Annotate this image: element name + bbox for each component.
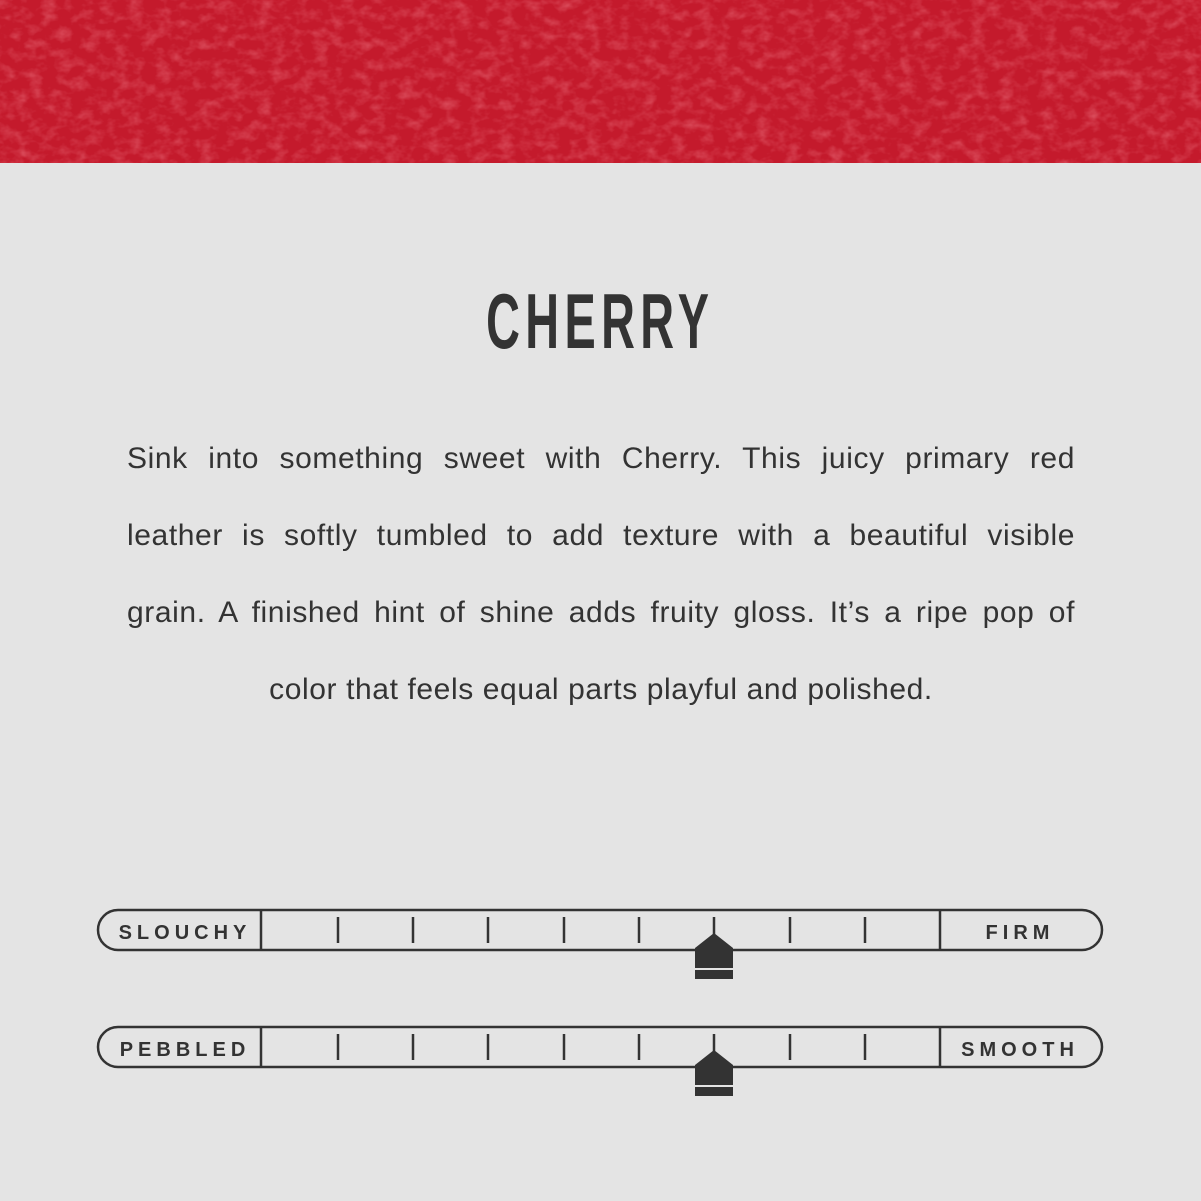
slider: pebbled to smooth: SMOOTH bbox=[961, 1039, 1079, 1061]
description text bbox=[127, 442, 1075, 706]
slider: slouchy to firm: FIRM bbox=[986, 922, 1054, 944]
slider: pebbled to smooth: PEBBLED bbox=[120, 1039, 250, 1061]
title: CHERRY bbox=[486, 277, 715, 365]
slider: pebbled to smooth bbox=[98, 1027, 1102, 1096]
marker bbox=[695, 933, 733, 968]
slider: slouchy to firm: SLOUCHY bbox=[119, 922, 251, 944]
description text: grain. A finished hint of shine adds fruity gloss. It’s a ripe pop of bbox=[127, 596, 1075, 629]
leather texture banner bbox=[0, 0, 1201, 163]
marker bbox=[695, 1050, 733, 1085]
description text: leather is softly tumbled to add texture with a beautiful visible bbox=[127, 519, 1075, 552]
slider: slouchy to firm bbox=[98, 910, 1102, 979]
description text: Sink into something sweet with Cherry. This juicy primary red bbox=[127, 442, 1075, 475]
description text: color that feels equal parts playful and polished. bbox=[269, 673, 933, 706]
